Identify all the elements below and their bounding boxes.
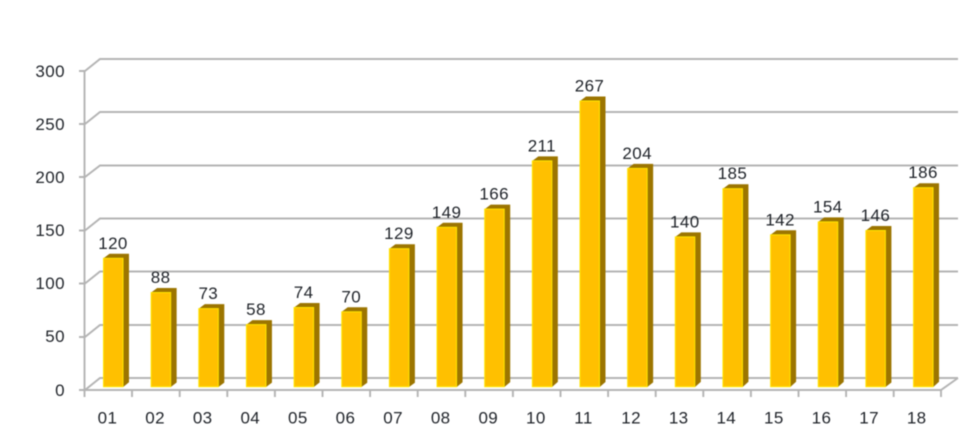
x-axis labels: 10 — [526, 408, 546, 428]
bar 12 — [622, 144, 653, 387]
bar 06: 70 — [341, 287, 361, 306]
x-axis labels: 03 — [193, 408, 213, 428]
bar 12: 204 — [622, 144, 652, 163]
bar 16 — [813, 197, 844, 387]
bar 10: 211 — [528, 136, 556, 155]
x-axis labels: 07 — [383, 408, 403, 428]
bar 05 — [294, 283, 320, 387]
y-axis labels: 250 — [35, 115, 65, 134]
bar 16: 154 — [813, 197, 843, 216]
y-axis labels: 0 — [55, 381, 65, 400]
bar 14: 185 — [718, 164, 747, 183]
y-axis labels: 200 — [35, 168, 65, 187]
y-axis labels — [35, 62, 65, 400]
x-axis labels: 12 — [621, 408, 641, 428]
y-axis labels: 300 — [35, 62, 65, 81]
x-axis labels: 04 — [240, 408, 260, 428]
bar 15: 142 — [765, 210, 795, 229]
bar 02: 88 — [151, 268, 171, 287]
x-axis labels: 09 — [478, 408, 498, 428]
bar 17 — [861, 206, 891, 387]
x-axis labels: 16 — [812, 408, 831, 428]
x-axis labels: 17 — [859, 408, 879, 428]
bar 11: 267 — [575, 76, 604, 96]
bar 07: 129 — [384, 224, 414, 243]
x-axis labels: 01 — [98, 408, 117, 428]
bar 11 — [575, 76, 606, 387]
bar 08: 149 — [432, 203, 461, 222]
y-axis labels: 100 — [35, 274, 65, 293]
x-axis labels: 15 — [764, 408, 784, 428]
bar 10 — [528, 136, 558, 387]
bar 01 — [98, 234, 129, 387]
bar 07 — [384, 224, 415, 387]
bar 18 — [908, 163, 939, 387]
bar 17: 146 — [861, 206, 890, 225]
bar 15 — [765, 210, 796, 387]
x-axis labels: 11 — [574, 408, 593, 428]
y-axis labels: 150 — [35, 221, 65, 240]
bar 01: 120 — [98, 234, 128, 253]
bar 09: 166 — [479, 185, 509, 204]
y-axis labels: 50 — [45, 327, 65, 346]
bar 03 — [198, 284, 224, 387]
x-axis labels: 06 — [336, 408, 355, 428]
bar 13: 140 — [670, 212, 700, 231]
x-axis labels: 13 — [669, 408, 689, 428]
x-axis labels: 05 — [288, 408, 308, 428]
bar 14 — [718, 164, 748, 387]
x-axis labels — [98, 408, 927, 428]
x-axis labels: 02 — [145, 408, 165, 428]
bar 04: 58 — [246, 300, 266, 319]
x-axis labels: 14 — [716, 408, 736, 428]
bar 03: 73 — [198, 284, 218, 303]
bar 05: 74 — [294, 283, 313, 302]
bar 06 — [341, 287, 367, 387]
bar 04 — [246, 300, 272, 387]
x-axis labels: 18 — [907, 408, 927, 428]
x-axis labels: 08 — [431, 408, 451, 428]
bar 18: 186 — [908, 163, 938, 182]
bar 09 — [479, 185, 510, 387]
bar 02 — [151, 268, 177, 387]
bar 08 — [432, 203, 463, 387]
bar 13 — [670, 212, 701, 387]
